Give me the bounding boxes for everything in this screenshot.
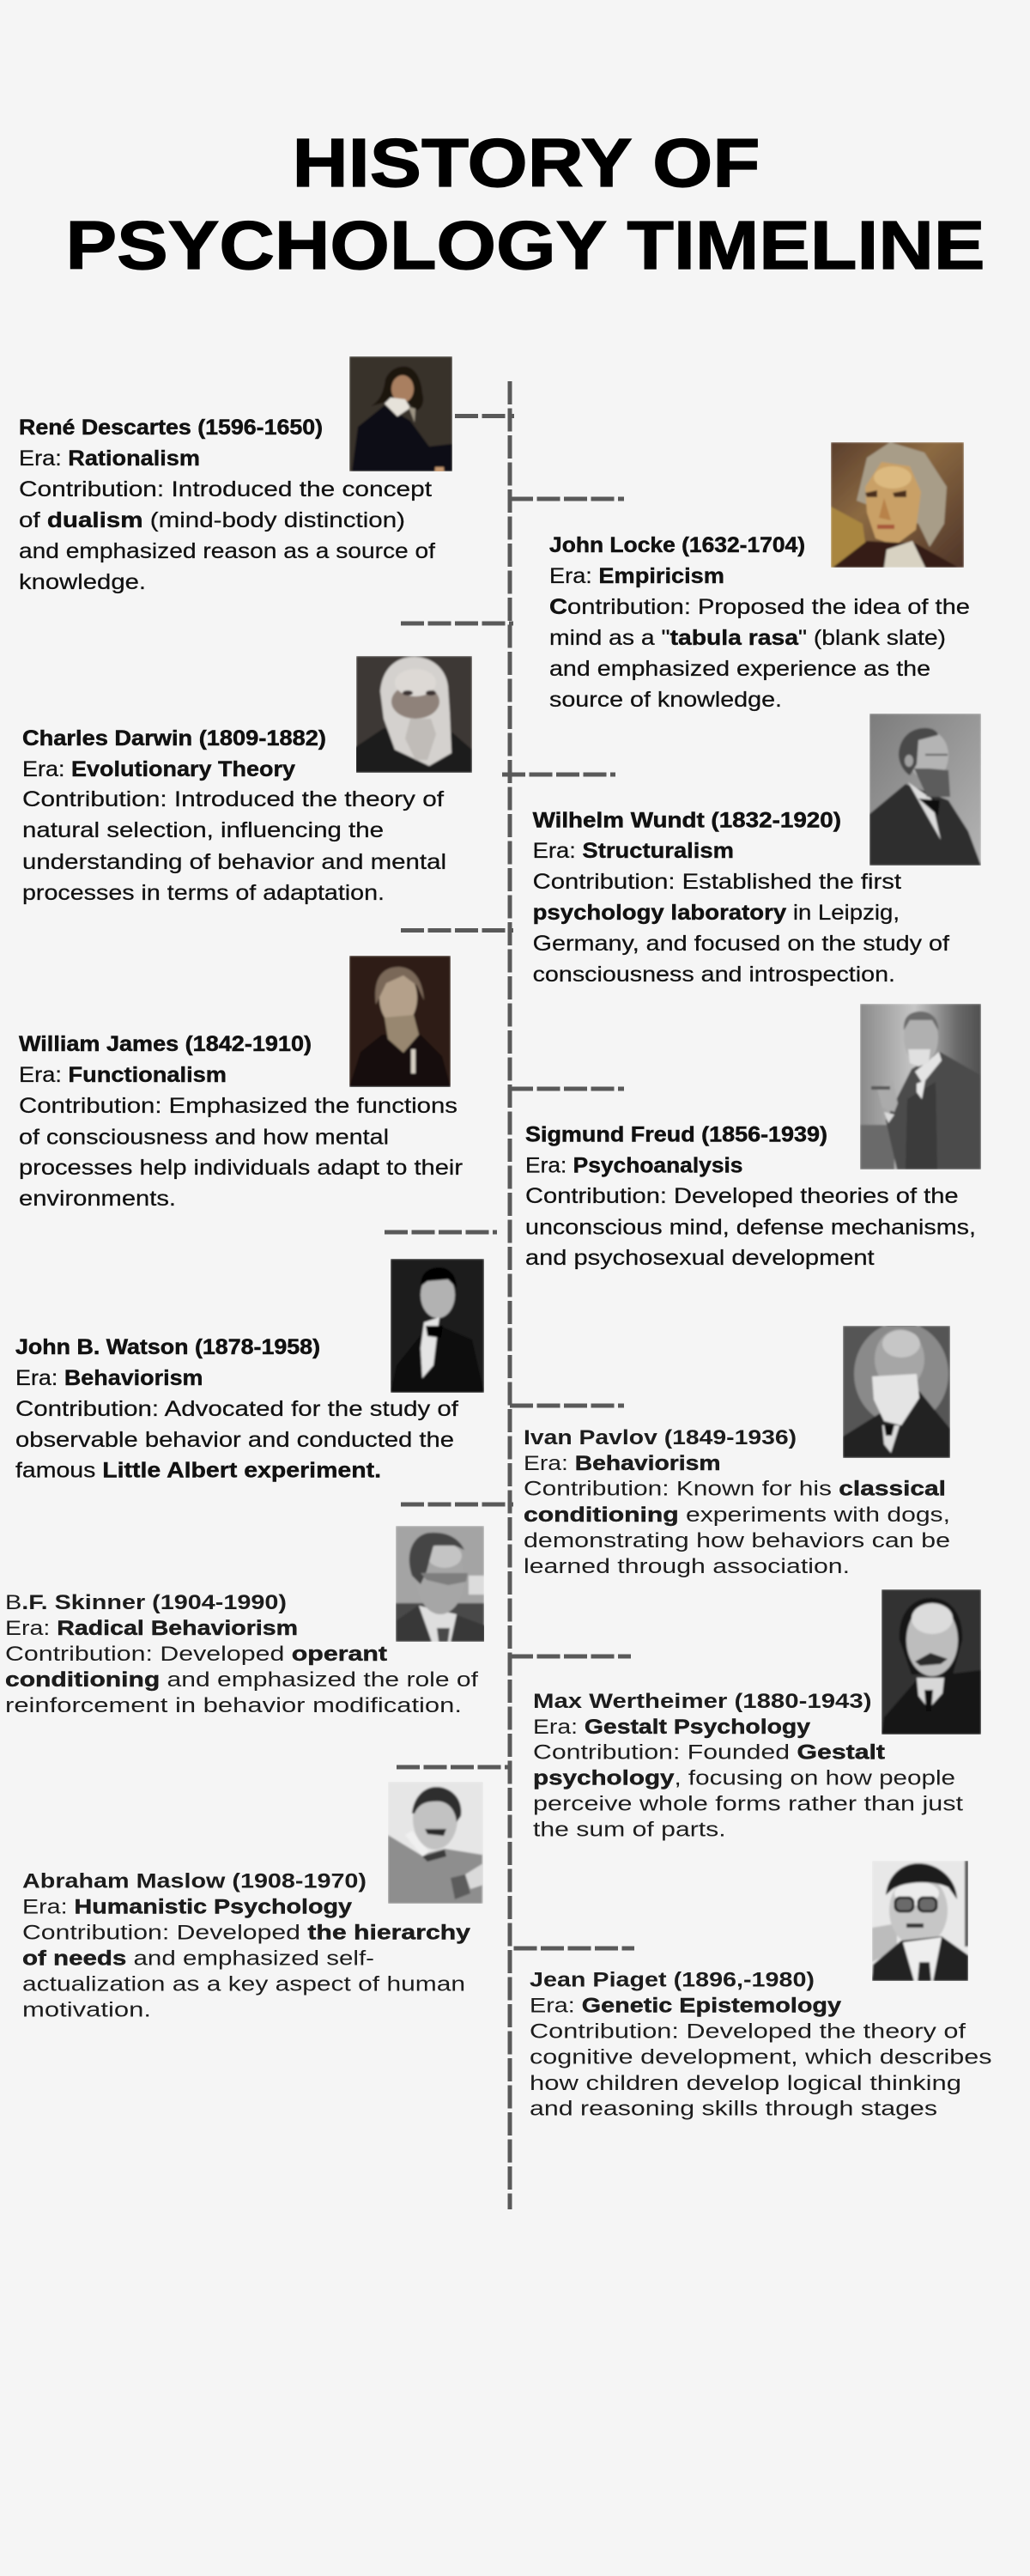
connector to spine (455, 414, 514, 418)
name: Ivan Pavlov: Ivan Pavlov (1849-1936) (524, 1426, 797, 1449)
name: William James: William James (1842-1910) (19, 1032, 312, 1056)
contribution text: learned through association. (524, 1555, 850, 1578)
contribution text (19, 1094, 463, 1211)
portrait: John B. Watson (391, 1259, 484, 1393)
era: Rationalism: Era: Rationalism (19, 447, 200, 471)
contribution text (530, 2020, 992, 2121)
panel: Max Wertheimer (510, 1589, 981, 1841)
portrait: Sigmund Freud (860, 1004, 981, 1170)
title (65, 125, 985, 283)
portrait: René Descartes (349, 356, 452, 472)
contribution text (22, 787, 446, 905)
portrait: Charles Darwin (355, 656, 472, 773)
portrait: Jean Piaget (872, 1861, 968, 1981)
panel: John B. Watson (15, 1232, 497, 1482)
contribution text: Contribution: Advocated for the study of (15, 1397, 458, 1421)
contribution text: the sum of parts. (533, 1819, 726, 1841)
contribution text: understanding of behavior and mental (22, 850, 446, 874)
connector to spine (510, 496, 624, 501)
contribution text: actualization as a key aspect of human (22, 1973, 465, 1996)
contribution text: perceive whole forms rather than just (533, 1793, 963, 1815)
name: Jean Piaget: Jean Piaget (1896,-1980) (530, 1968, 815, 1992)
era: Behaviorism: Era: Behaviorism (524, 1452, 721, 1475)
name: John Locke: John Locke (1632-1704) (549, 533, 805, 557)
contribution text: Contribution: Emphasized the functions (19, 1094, 457, 1118)
portrait: Abraham Maslow (388, 1782, 483, 1904)
contribution text: Contribution: Developed theories of the (525, 1184, 959, 1208)
contribution text: conditioning experiments with dogs, (524, 1504, 950, 1527)
contribution text: processes in terms of adaptation. (22, 881, 385, 905)
contribution text (524, 1477, 950, 1578)
contribution text (533, 870, 949, 987)
contribution text: Contribution: Proposed the idea of the (549, 595, 970, 619)
portrait: Max Wertheimer (882, 1589, 981, 1735)
portrait: John Locke (831, 442, 964, 568)
panel: René Descartes (19, 356, 514, 594)
panel: William James (19, 931, 513, 1211)
connector to spine (502, 773, 615, 776)
contribution text: Contribution: Introduced the theory of (22, 787, 444, 811)
era: Gestalt Psychology: Era: Gestalt Psychology (533, 1716, 811, 1739)
contribution text: Contribution: Developed the theory of (530, 2020, 966, 2044)
era: Radical Behaviorism: Era: Radical Behaviorism (5, 1617, 298, 1640)
panel: Abraham Maslow (22, 1767, 509, 2021)
contribution text (15, 1397, 458, 1482)
name: B.F. Skinner: B.F. Skinner (1904-1990) (5, 1591, 287, 1614)
contribution text: cognitive development, which describes (530, 2045, 992, 2069)
connector to spine (385, 1230, 497, 1235)
era: Genetic Epistemology: Era: Genetic Epistemology (530, 1994, 842, 2018)
contribution text: Contribution: Established the first (533, 870, 901, 894)
name: Wilhelm Wundt: Wilhelm Wundt (1832-1920) (533, 809, 841, 833)
portrait: B.F. Skinner (396, 1526, 485, 1642)
contribution text: Contribution: Developed the hierarchy (22, 1922, 471, 1944)
contribution text: and reasoning skills through stages (530, 2097, 937, 2121)
contribution text: source of knowledge. (549, 688, 782, 712)
contribution text: motivation. (22, 1999, 151, 2021)
contribution text (525, 1184, 976, 1270)
contribution text (5, 1643, 478, 1717)
name: René Descartes: René Descartes (1596-1650) (19, 416, 323, 440)
contribution text: of needs and emphasized self- (22, 1947, 374, 1970)
contribution text: processes help individuals adapt to their (19, 1156, 463, 1180)
panel: Ivan Pavlov (510, 1322, 950, 1578)
contribution text: and psychosexual development (525, 1246, 875, 1270)
contribution text: Contribution: Founded Gestalt (533, 1741, 885, 1764)
contribution text: of consciousness and how mental (19, 1125, 389, 1149)
timeline spine (508, 381, 512, 2209)
panel: Wilhelm Wundt (502, 714, 981, 987)
era: Humanistic Psychology: Era: Humanistic Psychology (22, 1896, 353, 1918)
contribution text: famous Little Albert experiment. (15, 1458, 381, 1482)
era: Structuralism: Era: Structuralism (533, 839, 734, 863)
name: Max Wertheimer: Max Wertheimer (1880-1943) (533, 1690, 872, 1713)
era: Empiricism: Era: Empiricism (549, 564, 724, 588)
contribution text: conditioning and emphasized the role of (5, 1668, 478, 1692)
portrait: William James (349, 956, 451, 1087)
contribution text: mind as a " tabula rasa " (blank slate) (549, 626, 946, 650)
panel: Sigmund Freud (510, 1004, 981, 1270)
era: Functionalism: Era: Functionalism (19, 1063, 227, 1087)
title: PSYCHOLOGY TIMELINE (65, 207, 985, 283)
name: Abraham Maslow: Abraham Maslow (1908-1970) (22, 1870, 367, 1893)
connector to spine (510, 1087, 624, 1091)
contribution text: observable behavior and conducted the (15, 1428, 454, 1452)
connector to spine (510, 1403, 624, 1408)
contribution text: and emphasized experience as the (549, 657, 930, 681)
panel: Charles Darwin (22, 623, 513, 905)
contribution text: Germany, and focused on the study of (533, 932, 949, 956)
contribution text (533, 1741, 963, 1841)
name: John B. Watson: John B. Watson (1878-1958) (15, 1335, 320, 1359)
era: Evolutionary Theory: Era: Evolutionary Theory (22, 757, 295, 781)
contribution text: reinforcement in behavior modification. (5, 1694, 462, 1717)
panel: John Locke (510, 442, 970, 712)
contribution text: demonstrating how behaviors can be (524, 1529, 950, 1552)
connector to spine (401, 1503, 513, 1506)
era: Behaviorism: Era: Behaviorism (15, 1366, 203, 1390)
contribution text: and emphasized reason as a source of (19, 539, 435, 563)
panel: Jean Piaget (513, 1861, 992, 2121)
contribution text: Contribution: Known for his classical (524, 1477, 946, 1501)
contribution text: environments. (19, 1187, 176, 1211)
contribution text: psychology laboratory in Leipzig, (533, 901, 900, 925)
connector to spine (397, 1765, 509, 1769)
contribution text: Contribution: Introduced the concept (19, 477, 432, 501)
name: Sigmund Freud: Sigmund Freud (1856-1939) (525, 1123, 827, 1147)
portrait: Wilhelm Wundt (869, 714, 981, 866)
name: Charles Darwin: Charles Darwin (1809-1882) (22, 726, 326, 750)
era: Psychoanalysis: Era: Psychoanalysis (525, 1154, 743, 1178)
connector to spine (401, 622, 513, 625)
contribution text: consciousness and introspection. (533, 963, 895, 987)
portrait: Ivan Pavlov (843, 1322, 950, 1458)
connector to spine (513, 1946, 634, 1951)
contribution text: Contribution: Developed operant (5, 1643, 387, 1666)
contribution text (19, 477, 435, 594)
title: HISTORY OF (292, 125, 760, 201)
contribution text (22, 1922, 471, 2021)
contribution text: how children develop logical thinking (530, 2072, 961, 2095)
contribution text: unconscious mind, defense mechanisms, (525, 1216, 976, 1240)
contribution text: of dualism (mind-body distinction) (19, 508, 405, 532)
contribution text: psychology , focusing on how people (533, 1767, 955, 1789)
contribution text: natural selection, influencing the (22, 818, 384, 842)
contribution text: knowledge. (19, 570, 146, 594)
connector to spine (401, 928, 513, 933)
panel: B.F. Skinner (5, 1504, 513, 1717)
contribution text (549, 595, 970, 712)
connector to spine (510, 1654, 631, 1659)
